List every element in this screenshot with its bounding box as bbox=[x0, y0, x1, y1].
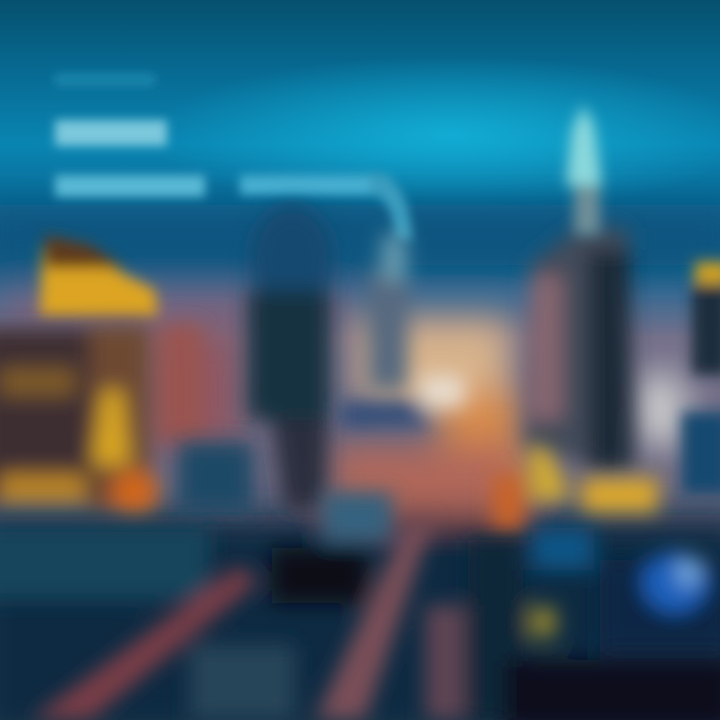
blurred heading text bbox=[55, 74, 412, 240]
left lower buildings bbox=[0, 325, 202, 514]
foreground streets and blocks bbox=[0, 492, 720, 720]
small central tower bbox=[368, 235, 408, 390]
far right tower bbox=[682, 262, 720, 494]
horizon glow bbox=[0, 205, 720, 500]
central dark tower bbox=[248, 205, 334, 510]
right skyscraper bbox=[525, 228, 636, 470]
left yellow-roofed building bbox=[40, 235, 158, 316]
mid city blocks bbox=[178, 375, 658, 530]
skyscraper spire bbox=[566, 105, 602, 235]
lower city base bbox=[0, 330, 720, 720]
